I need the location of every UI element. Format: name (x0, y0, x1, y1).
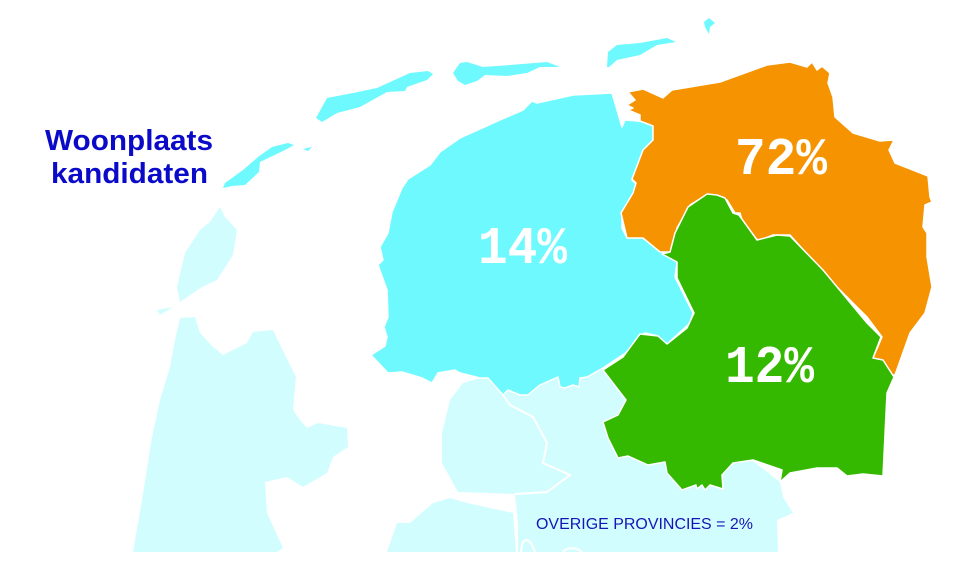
province: Groningen (621, 62, 932, 375)
island: Schiermonnikoog (607, 38, 676, 67)
label: Groningen 72%: 72% (735, 130, 827, 190)
South Flevoland (387, 498, 516, 552)
title: Woonplaats (45, 125, 213, 157)
Wadden islands (223, 18, 715, 188)
percentage labels (478, 130, 827, 398)
province: Drenthe (603, 194, 894, 490)
island: Rottumeroog (704, 18, 715, 34)
other provinces: pale background map (133, 207, 793, 552)
Vlieland sliver (157, 307, 173, 315)
province: Friesland (371, 93, 693, 395)
island: Vlieland (223, 143, 294, 188)
label: Friesland 14%: 14% (478, 219, 567, 279)
island: Ameland (453, 62, 560, 85)
title: kandidaten (51, 158, 208, 190)
Noordoostpolder, Overijssel and Gelderland (442, 365, 793, 552)
river lines (503, 395, 582, 552)
label: other provinces: OVERIGE PROVINCIES = 2% (536, 516, 753, 533)
North Holland (133, 317, 348, 552)
title (45, 125, 213, 190)
Texel (177, 207, 237, 302)
island: small sandbank (303, 147, 312, 151)
label: Drenthe 12%: 12% (725, 338, 814, 398)
island: Terschelling (316, 71, 433, 122)
